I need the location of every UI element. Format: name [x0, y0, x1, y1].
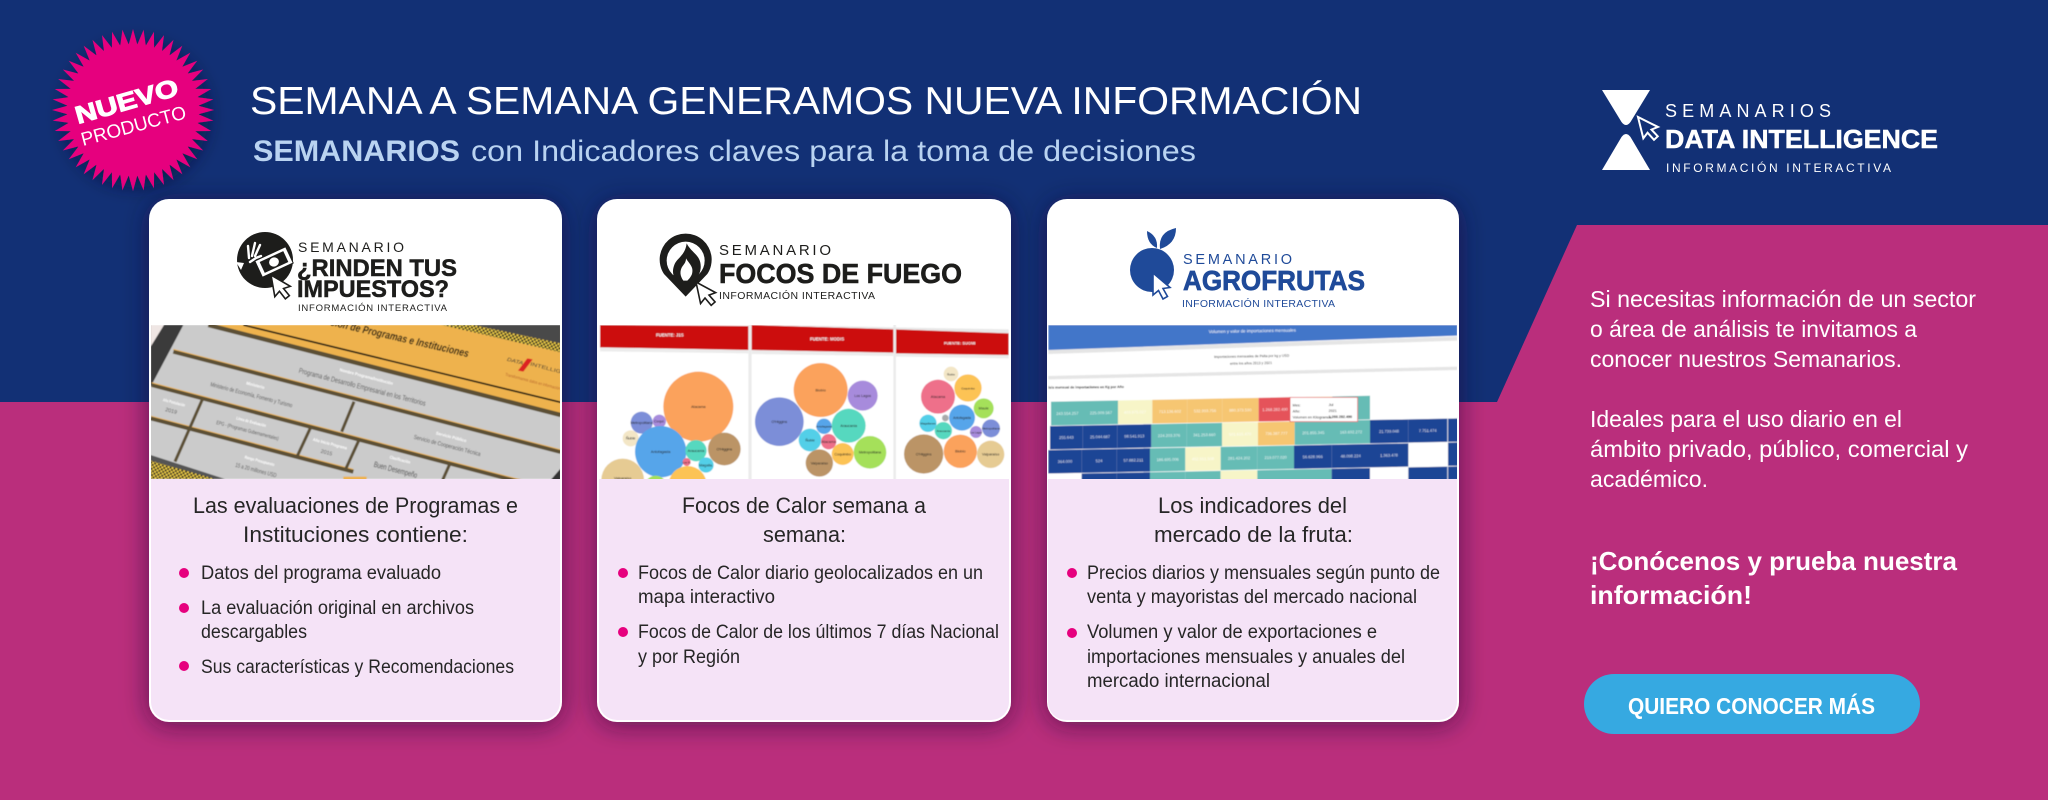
logo: semanarios data intelligence: INFORMACIÓN INTERACTIVA — [1666, 160, 1891, 175]
chart: bubble charts by region and source: Coqui. — [654, 420, 665, 424]
button: quiero conocer más — [1584, 674, 1920, 734]
chart: import volume heatmap with tooltip: 501.615.470 — [1229, 431, 1252, 437]
chart: bubble charts by region and source: Araucanía — [937, 429, 950, 433]
image: tablet with program evaluation table: Año Postulación — [162, 397, 186, 408]
image: tablet with program evaluation table: Línea de Evaluación — [236, 415, 267, 428]
chart: import volume heatmap with tooltip: Importaciones mensuales de Palta por kg y USD — [1214, 354, 1290, 359]
image: tablet with program evaluation table: Servicio de Cooperación Técnica — [413, 435, 482, 458]
panel: agrofrutas description: importaciones mensuales y anuales del — [1087, 647, 1405, 668]
image: tablet with program evaluation table: Rango Presupuesto — [244, 454, 275, 467]
image: tablet with program evaluation table: Programa de Desarrollo Empresarial en los Territorios — [298, 366, 427, 408]
chart: import volume heatmap with tooltip: 25.044.687 — [1090, 434, 1111, 439]
logo: focos de fuego: INFORMACIÓN INTERACTIVA — [719, 289, 875, 302]
chart: bubble charts by region and source: FUENTE: MODIS — [810, 337, 844, 342]
panel: rinden tus impuestos card — [149, 199, 562, 722]
chart: bubble charts by region and source: Ñuble — [947, 371, 955, 376]
chart: import volume heatmap with tooltip: 364.000 — [1058, 459, 1073, 464]
chart: bubble charts by region and source: Valparaíso — [614, 476, 631, 480]
chart: import volume heatmap with tooltip: 163.692.272 — [1340, 429, 1363, 435]
chart: bubble charts by region and source: Araucanía — [688, 449, 705, 453]
button: quiero conocer más: QUIERO CONOCER MÁS — [1628, 692, 1875, 719]
chart: import volume heatmap with tooltip: 243.554.257 — [1056, 411, 1079, 416]
panel: focos de fuego description: mapa interactivo — [638, 587, 775, 608]
logo: agrofrutas — [1130, 228, 1365, 310]
image: tablet with program evaluation table: Nombre Programa/Institución — [339, 367, 394, 386]
chart: import volume heatmap with tooltip: 255.643 — [1059, 435, 1074, 440]
chart: import volume heatmap with tooltip: Mes: — [1293, 404, 1301, 408]
chart: bubble charts by region and source: Los R. — [682, 460, 691, 464]
text block: invitation: Si necesitas información de un sector — [1590, 286, 1976, 312]
chart: bubble charts by region and source: Maule — [979, 407, 989, 411]
chart: import volume heatmap with tooltip: 403.975.027 — [1124, 409, 1147, 415]
chart: bubble charts by region and source: Atacama — [931, 395, 946, 399]
chart: bubble charts by region and source: Ñuble — [626, 436, 635, 441]
image: tablet with program evaluation table: Año Inicio Programa — [312, 437, 348, 451]
chart: import volume heatmap with tooltip: 1.268.282.490 — [1262, 407, 1289, 412]
chart: import volume heatmap with tooltip: 7.751.474 — [1419, 428, 1437, 433]
text block: call to action: información! — [1590, 580, 1752, 610]
image: tablet with program evaluation table: INTELLIG — [529, 361, 562, 375]
panel: focos de fuego description: Focos de Calor semana a — [682, 493, 926, 518]
text block: invitation: o área de análisis te invitamos a — [1590, 316, 1917, 342]
chart: import volume heatmap with tooltip: 2021 — [1329, 409, 1337, 413]
panel: rinden tus impuestos description — [151, 479, 560, 720]
chart: import volume heatmap with tooltip: 1.363.478 — [1380, 453, 1399, 458]
panel: focos de fuego description: Focos de Calor de los últimos 7 días Nacional — [638, 622, 999, 643]
chart: import volume heatmap with tooltip: 1.268.282.490 — [1329, 415, 1352, 419]
text block: call to action: ¡Conócenos y prueba nuestra — [1590, 546, 1958, 576]
badge: nuevo producto starburst — [10, 0, 239, 242]
chart: bubble charts by region and source: Coquimbo — [961, 386, 975, 390]
chart: bubble charts by region and source: Biobío — [815, 388, 826, 392]
chart: import volume heatmap with tooltip: 57.882.211 — [1123, 457, 1144, 463]
chart: bubble charts by region and source: Metropolitana — [982, 427, 1000, 431]
chart: bubble charts by region and source: Antofagasta — [953, 416, 971, 420]
chart: import volume heatmap with tooltip: Jul — [1329, 403, 1334, 407]
badge: nuevo producto starburst: NUEVO — [72, 75, 182, 130]
subtitle: SEMANARIOS — [253, 135, 460, 168]
chart: import volume heatmap with tooltip: 532.993.756 — [1194, 408, 1217, 413]
panel: agrofrutas description — [1048, 479, 1457, 720]
logo: semanarios data intelligence: SEMANARIOS — [1665, 101, 1831, 121]
logo: focos de fuego: FOCOS DE FUEGO — [719, 258, 962, 289]
text block: ideal uses: académico. — [1590, 466, 1708, 492]
chart: bubble charts by region and source — [599, 325, 1009, 479]
chart: bubble charts by region and source: Valparaíso — [811, 461, 828, 465]
logo: rinden tus impuestos — [236, 232, 457, 314]
panel: rinden tus impuestos description: descargables — [201, 622, 307, 643]
panel: agrofrutas description: Los indicadores del — [1158, 493, 1347, 518]
image: tablet with program evaluation table: Ministerio — [246, 380, 265, 390]
chart: import volume heatmap with tooltip: 452.551.508 — [1192, 456, 1215, 461]
text block: call to action — [1590, 546, 1958, 610]
chart: bubble charts by region and source: Antofagasta — [651, 450, 671, 454]
logo: focos de fuego — [660, 234, 962, 307]
chart: import volume heatmap with tooltip: 880.373.590 — [1229, 407, 1252, 413]
title: SEMANA A SEMANA GENERAMOS NUEVA INFORMACIÓN — [250, 80, 1362, 123]
panel: rinden tus impuestos description: La evaluación original en archivos — [201, 598, 474, 619]
chart: bubble charts by region and source: Atacama — [691, 405, 707, 409]
text block: invitation: conocer nuestros Semanarios. — [1590, 346, 1902, 372]
chart: import volume heatmap with tooltip: 524 — [1096, 458, 1103, 463]
chart: import volume heatmap with tooltip: entre los años 2013 y 2021 — [1230, 361, 1272, 366]
logo: rinden tus impuestos: SEMANARIO — [298, 239, 404, 255]
logo: semanarios data intelligence: DATA INTELLIGENCE — [1665, 124, 1938, 154]
chart: bubble charts by region and source: O'Higgins — [916, 452, 932, 456]
text block: ideal uses: ámbito privado, público, comercial y — [1590, 436, 1969, 462]
chart: import volume heatmap with tooltip: 225.009.567 — [1090, 410, 1113, 415]
chart: import volume heatmap with tooltip: 713.136.602 — [1159, 409, 1182, 414]
chart: bubble charts by region and source: Ñuble — [805, 437, 815, 442]
chart: import volume heatmap with tooltip: 219.077.020 — [1265, 455, 1288, 460]
chart: bubble charts by region and source: Biobío — [955, 450, 966, 454]
panel: agrofrutas description: venta y mayoristas del mercado nacional — [1087, 587, 1417, 608]
panel: rinden tus impuestos description: Datos del programa evaluado — [201, 563, 441, 584]
chart: bubble charts by region and source: Los Lagos — [854, 394, 871, 398]
panel: focos de fuego description: y por Región — [638, 647, 740, 668]
text block: invitation — [1590, 286, 1976, 372]
panel: rinden tus impuestos description: Las evaluaciones de Programas e — [193, 493, 518, 518]
panel: focos de fuego description: Focos de Calor diario geolocalizados en un — [638, 563, 983, 584]
chart: import volume heatmap with tooltip: 56.628.966 — [1303, 454, 1323, 459]
chart: bubble charts by region and source: Coquimbo — [834, 452, 851, 456]
chart: import volume heatmap with tooltip: 48.098.224 — [1341, 453, 1361, 459]
chart: bubble charts by region and source: Atacama — [821, 440, 837, 444]
panel: agrofrutas description: mercado internacional — [1087, 671, 1270, 692]
logo: rinden tus impuestos: ¿RINDEN TUS — [297, 255, 457, 282]
image: tablet with program evaluation table: ción de Programas e Instituciones — [329, 317, 470, 360]
logo: agrofrutas: INFORMACIÓN INTERACTIVA — [1182, 297, 1335, 310]
chart: import volume heatmap with tooltip: Volumen y valor de importaciones mensuales — [1209, 328, 1296, 334]
panel: right magenta slanted area — [1497, 225, 2048, 402]
panel: focos de fuego description: semana: — [763, 522, 846, 547]
image: tablet with program evaluation table: 2015 — [320, 449, 333, 458]
panel: agrofrutas description: Volumen y valor de exportaciones e — [1087, 622, 1377, 643]
subtitle: con Indicadores claves para la toma de decisiones — [471, 135, 1196, 168]
chart: import volume heatmap with tooltip: Año: — [1293, 410, 1300, 414]
panel: rinden tus impuestos description: Instituciones contiene: — [243, 522, 468, 547]
image: tablet with program evaluation table: EPG - (Programas Gubernamentales) — [215, 420, 279, 442]
chart: import volume heatmap with tooltip: 186.695.006 — [1157, 457, 1180, 462]
badge: nuevo producto starburst: PRODUCTO — [79, 103, 189, 151]
image: tablet with program evaluation table — [151, 325, 560, 479]
chart: import volume heatmap with tooltip: 98.541.913 — [1124, 433, 1145, 439]
image: tablet with program evaluation table: Transformamos datos en información — [505, 372, 561, 391]
chart: bubble charts by region and source: O'Higgins — [771, 420, 787, 424]
chart: import volume heatmap with tooltip: 21.739.048 — [1379, 428, 1400, 434]
panel: focos de fuego card — [597, 199, 1011, 722]
image: tablet with program evaluation table: DATA — [506, 357, 525, 367]
chart: import volume heatmap with tooltip: 224.203.376 — [1158, 433, 1181, 438]
panel: agrofrutas description: Precios diarios y mensuales según punto de — [1087, 563, 1440, 584]
chart: import volume heatmap with tooltip: Volumen en Kilogramos: — [1293, 416, 1332, 420]
chart: bubble charts by region and source: Magallanes — [920, 422, 936, 426]
chart: bubble charts by region and source: Metropolitana — [859, 451, 882, 455]
logo: agrofrutas: AGROFRUTAS — [1183, 265, 1365, 296]
image: tablet with program evaluation table: Clasificación — [389, 454, 411, 465]
image: tablet with program evaluation table: Ministerio de Economía, Fomento y Turismo — [209, 382, 293, 410]
panel: agrofrutas card — [1047, 199, 1459, 722]
chart: bubble charts by region and source: FUENTE: J1S — [656, 333, 684, 338]
chart: import volume heatmap with tooltip: isis mensual de importaciones en Kg por Año — [1048, 385, 1124, 390]
chart: import volume heatmap with tooltip: 281.424.202 — [1228, 455, 1251, 461]
image: tablet with program evaluation table: Servicio Público — [435, 430, 467, 443]
chart: bubble charts by region and source: Araucanía — [840, 424, 858, 428]
logo: agrofrutas: SEMANARIO — [1183, 252, 1292, 268]
chart: import volume heatmap with tooltip: 201.855.345 — [1302, 430, 1325, 435]
chart: bubble charts by region and source: FUENTE: SUOMI — [944, 340, 975, 345]
logo: rinden tus impuestos: IMPUESTOS? — [297, 276, 449, 303]
text block: ideal uses: Ideales para el uso diario en el — [1590, 406, 1902, 432]
logo: rinden tus impuestos: INFORMACIÓN INTERACTIVA — [298, 303, 448, 314]
background: magenta lower band — [0, 402, 2048, 800]
chart: bubble charts by region and source: Los Lagos — [970, 430, 983, 434]
panel: focos de fuego description — [599, 479, 1009, 720]
logo: semanarios data intelligence — [1602, 90, 1938, 175]
chart: bubble charts by region and source: Valparaíso — [982, 453, 999, 457]
chart: import volume heatmap with tooltip: 341.253.660 — [1193, 432, 1216, 437]
background: navy upper band — [0, 0, 2048, 402]
image: tablet with program evaluation table: Buen Desempeño — [373, 460, 419, 480]
image: tablet with program evaluation table: 15 a 20 millones USD — [234, 463, 277, 479]
chart: bubble charts by region and source: O'Higgins — [716, 447, 732, 451]
chart: bubble charts by region and source: Metropolitana — [631, 421, 654, 425]
chart: bubble charts by region and source: Antofagasta — [816, 425, 832, 429]
chart: import volume heatmap with tooltip: 736.387.777 — [1265, 431, 1288, 436]
panel: rinden tus impuestos description: Sus características y Recomendaciones — [201, 657, 514, 678]
text block: ideal uses — [1590, 406, 1969, 492]
logo: focos de fuego: SEMANARIO — [719, 242, 831, 259]
panel: agrofrutas description: mercado de la fruta: — [1154, 522, 1353, 547]
chart: bubble charts by region and source: Magalla. — [699, 463, 713, 467]
chart: import volume heatmap with tooltip — [1048, 323, 1458, 488]
image: tablet with program evaluation table: 2019 — [164, 407, 178, 416]
